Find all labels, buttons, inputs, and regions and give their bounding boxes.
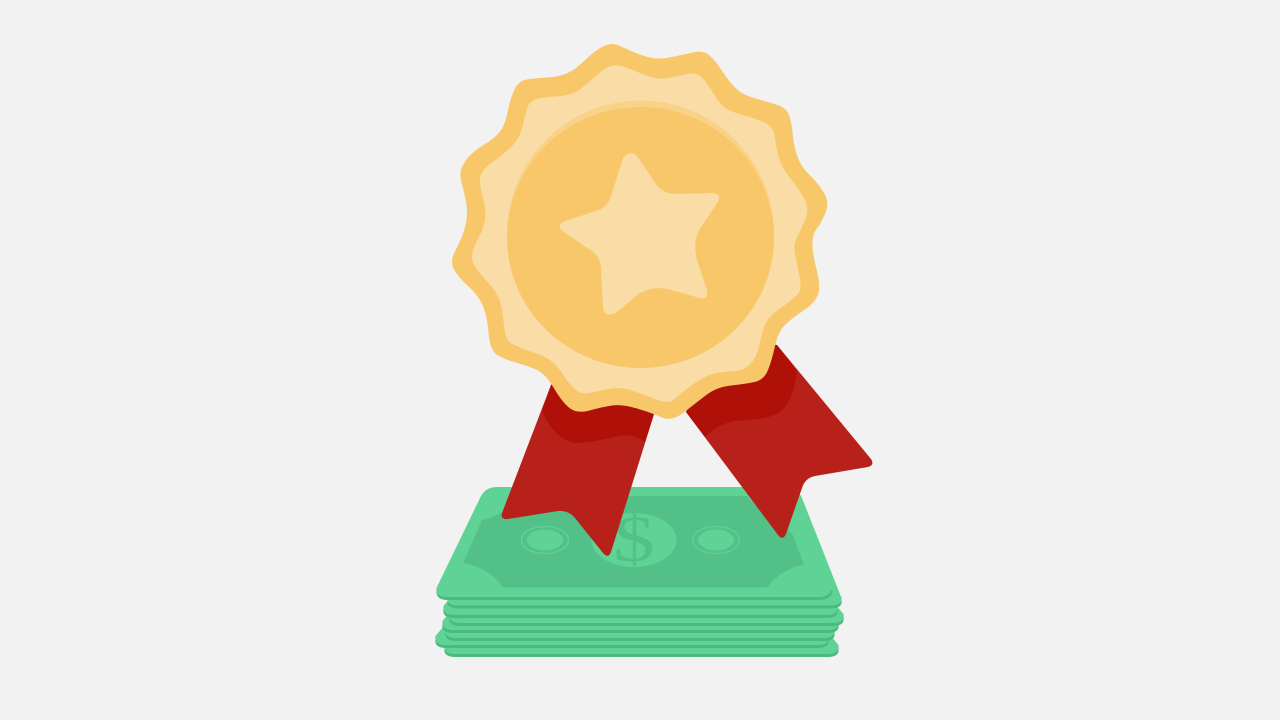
right oval emblem [692,526,740,554]
left oval emblem [522,526,568,554]
bill inner panel [463,496,804,588]
left ribbon shadow [542,340,660,443]
bill layer 6 [445,619,835,641]
money stack [435,487,844,657]
bill layer 7 [435,626,829,648]
right ribbon [686,340,872,538]
dollar sign: $ [613,503,655,576]
medal disc [507,107,774,368]
badge inner wavy face [472,65,807,402]
bill layer 4 [449,604,844,626]
right ribbon shadow [686,340,797,437]
bill layer 5 [442,611,839,633]
centre oval [592,513,676,567]
bill layer 8 [444,635,839,657]
medal rim highlight [507,100,774,368]
badge outer wavy edge [452,44,827,419]
star [560,153,719,315]
award badge [452,44,827,419]
top bill [436,487,832,600]
left ribbon [502,340,660,556]
bill layer 3 [443,596,838,618]
bill layer 2 [447,487,842,608]
